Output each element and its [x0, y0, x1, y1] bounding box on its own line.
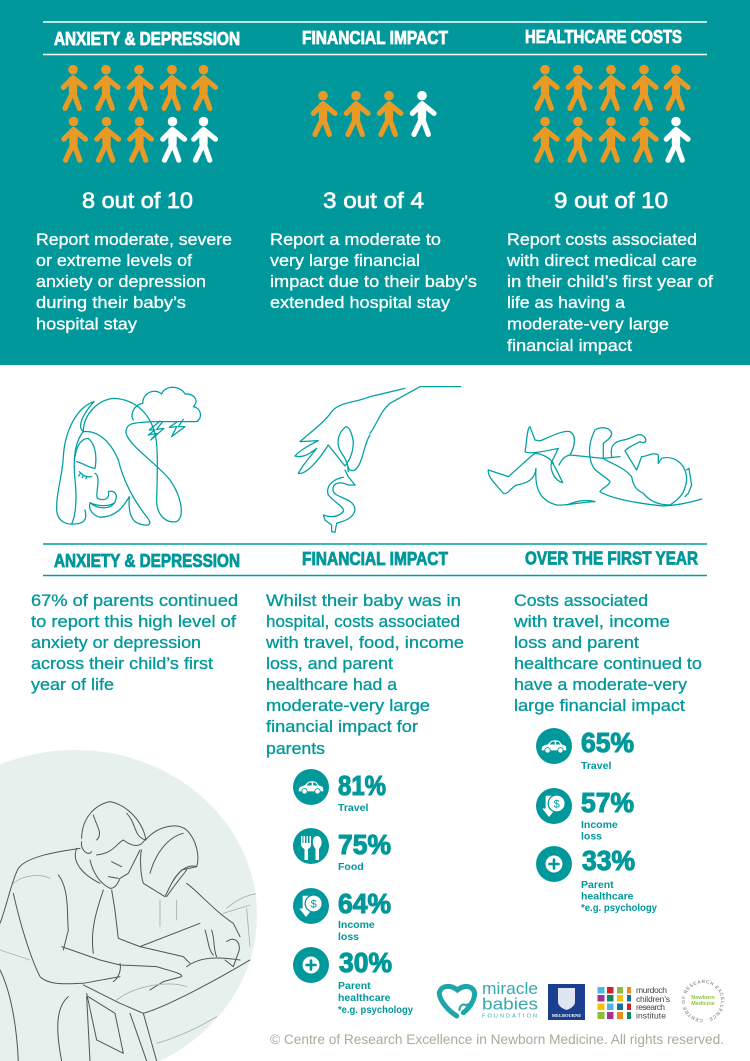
- text block: healthcare summary: in their child’s first year of: [507, 272, 713, 291]
- stat: travel 65%: 65%: [581, 727, 634, 758]
- stat: food 75%: 75%: [338, 829, 391, 860]
- heading: healthcare costs: HEALTHCARE COSTS: [525, 27, 682, 47]
- text block: anxiety summary: or extreme levels of: [36, 251, 192, 270]
- text block: costs during hospital stay: parents: [266, 739, 325, 758]
- logo: newborn medicine badge: Newborn: [691, 995, 715, 1001]
- stat: 3 out of 4: 3 out of 4: [323, 188, 424, 213]
- text block: anxiety summary: anxiety or depression: [36, 272, 206, 291]
- text block: costs during hospital stay: [265, 591, 464, 758]
- text block: costs during hospital stay: moderate-very large: [266, 696, 430, 715]
- logo: miracle babies foundation: FOUNDATION: [482, 1014, 537, 1020]
- stat: travel 65%: Travel: [581, 760, 611, 772]
- stat: parent healthcare 30%: 30%: [339, 947, 392, 978]
- text block: costs over first year: loss and parent: [514, 633, 639, 652]
- text block: costs over first year: healthcare continued to: [514, 654, 702, 673]
- stat: income loss 57%: 57%: [581, 787, 634, 818]
- heading: anxiety and depression, first year: ANXIETY & DEPRESSION: [54, 551, 240, 571]
- stat: income loss 64%: Income: [338, 919, 375, 931]
- stat: income loss 57%: [536, 787, 634, 842]
- text block: healthcare summary: life as having a: [507, 293, 626, 312]
- stat: parent healthcare 33%: [536, 845, 657, 914]
- stat: income loss 57%: Income: [581, 819, 618, 831]
- text block: anxiety summary: during their baby’s: [36, 293, 186, 312]
- text block: costs over first year: large financial impact: [514, 696, 685, 715]
- text block: anxiety over first year: anxiety or depression: [31, 633, 201, 652]
- stat: travel 81%: 81%: [338, 770, 386, 801]
- stat: 9 out of 10: 9 out of 10: [554, 188, 668, 213]
- text block: healthcare summary: financial impact: [507, 336, 632, 355]
- stat: travel 81%: Travel: [338, 802, 368, 814]
- stat: travel 81%: [293, 769, 386, 814]
- text block: costs over first year: with travel, income: [513, 612, 670, 631]
- text block: costs during hospital stay: healthcare had a: [266, 675, 398, 694]
- text block: financial summary: Report a moderate to: [270, 230, 441, 249]
- stat: income loss 64%: [293, 888, 391, 943]
- logo: murdoch children's research institute: children’s: [636, 994, 670, 1004]
- text block: healthcare summary: with direct medical care: [506, 251, 697, 270]
- stat: parent healthcare 30%: Parent: [338, 980, 371, 992]
- stat: parent healthcare 33%: 33%: [582, 845, 635, 876]
- text block: healthcare summary: moderate-very large: [507, 314, 669, 334]
- header rules: lower section: [43, 544, 707, 576]
- pictogram: 3 out of 4 people: [313, 91, 434, 134]
- stat: income loss 57%: loss: [581, 830, 602, 842]
- text block: costs over first year: have a moderate-very: [514, 675, 688, 694]
- pictogram: 8 out of 10 people: [63, 65, 215, 160]
- logo: miracle babies foundation: [439, 979, 538, 1020]
- logo: newborn medicine badge: CENTRE OF RESEARCH EXCELLENCE: [682, 980, 724, 1022]
- text block: healthcare summary: Report costs associated: [507, 230, 697, 249]
- stat: parent healthcare 33%: *e.g. psychology: [581, 902, 657, 914]
- text block: costs over first year: [513, 591, 702, 715]
- stat: income loss 64%: loss: [338, 931, 359, 943]
- text block: costs during hospital stay: loss, and parent: [266, 654, 393, 673]
- icon: hand holding dollar sign: [295, 387, 461, 532]
- text block: anxiety over first year: to report this high level of: [31, 612, 236, 631]
- text block: anxiety summary: hospital stay: [36, 314, 138, 334]
- logo: murdoch children's research institute: research: [636, 1002, 665, 1012]
- stat: parent healthcare 30%: *e.g. psychology: [338, 1004, 413, 1016]
- panel: teal summary band: [0, 0, 750, 365]
- text block: anxiety over first year: [31, 591, 238, 694]
- text block: healthcare summary: [506, 230, 713, 355]
- stat: food 75%: [293, 828, 391, 873]
- text block: costs during hospital stay: with travel, food, income: [265, 633, 464, 652]
- header rules: top band: [43, 22, 707, 54]
- text block: costs over first year: Costs associated: [514, 591, 648, 610]
- stat: 8 out of 10: 8 out of 10: [82, 188, 193, 213]
- heading: over the first year: OVER THE FIRST YEAR: [525, 548, 698, 568]
- logo: miracle babies foundation: babies: [482, 994, 538, 1014]
- stat: parent healthcare 30%: healthcare: [338, 992, 391, 1004]
- heading: financial impact, first year: FINANCIAL IMPACT: [302, 549, 448, 569]
- text block: financial summary: [270, 230, 477, 312]
- icon: woman with storm cloud: [57, 387, 200, 525]
- logo: miracle babies foundation: miracle: [482, 979, 538, 998]
- text block: financial summary: very large financial: [270, 251, 420, 270]
- stat: parent healthcare 33%: Parent: [581, 879, 614, 891]
- logo: murdoch children's research institute: [598, 985, 670, 1020]
- stat: income loss 64%: 64%: [338, 888, 391, 919]
- footer: copyright: © Centre of Research Excellence in Newborn Medicine. All rights reserved.: [270, 1032, 724, 1047]
- text block: costs during hospital stay: financial impact for: [266, 717, 418, 736]
- text block: financial summary: extended hospital stay: [270, 293, 451, 312]
- stat: travel 65%: [536, 727, 634, 772]
- text block: anxiety summary: [36, 230, 232, 334]
- text block: costs during hospital stay: hospital, costs associated: [266, 612, 460, 631]
- stat: parent healthcare 30%: [293, 947, 413, 1016]
- text block: financial summary: impact due to their baby’s: [270, 272, 477, 291]
- icon: baby lying down: [488, 427, 702, 506]
- logo: university of melbourne: [548, 984, 585, 1020]
- pictogram: 9 out of 10 people: [535, 65, 688, 160]
- text block: anxiety over first year: year of life: [31, 675, 114, 694]
- illustration: parents leaning over crib: [0, 750, 257, 1061]
- logo: murdoch children's research institute: institute: [636, 1010, 666, 1020]
- logo: newborn medicine badge: Medicine: [691, 1001, 715, 1007]
- text block: anxiety summary: Report moderate, severe: [36, 230, 232, 249]
- stat: food 75%: Food: [338, 861, 364, 873]
- text block: anxiety over first year: 67% of parents continued: [31, 591, 238, 610]
- logo: university of melbourne: MELBOURNE: [552, 1013, 581, 1018]
- stat: parent healthcare 33%: healthcare: [581, 890, 634, 902]
- logo: murdoch children's research institute: murdoch: [636, 985, 667, 995]
- text block: anxiety over first year: across their child’s first: [31, 654, 213, 673]
- text block: costs during hospital stay: Whilst their baby was in: [266, 591, 461, 610]
- heading: anxiety and depression: ANXIETY & DEPRESSION: [54, 29, 240, 49]
- heading: financial impact: FINANCIAL IMPACT: [302, 28, 448, 48]
